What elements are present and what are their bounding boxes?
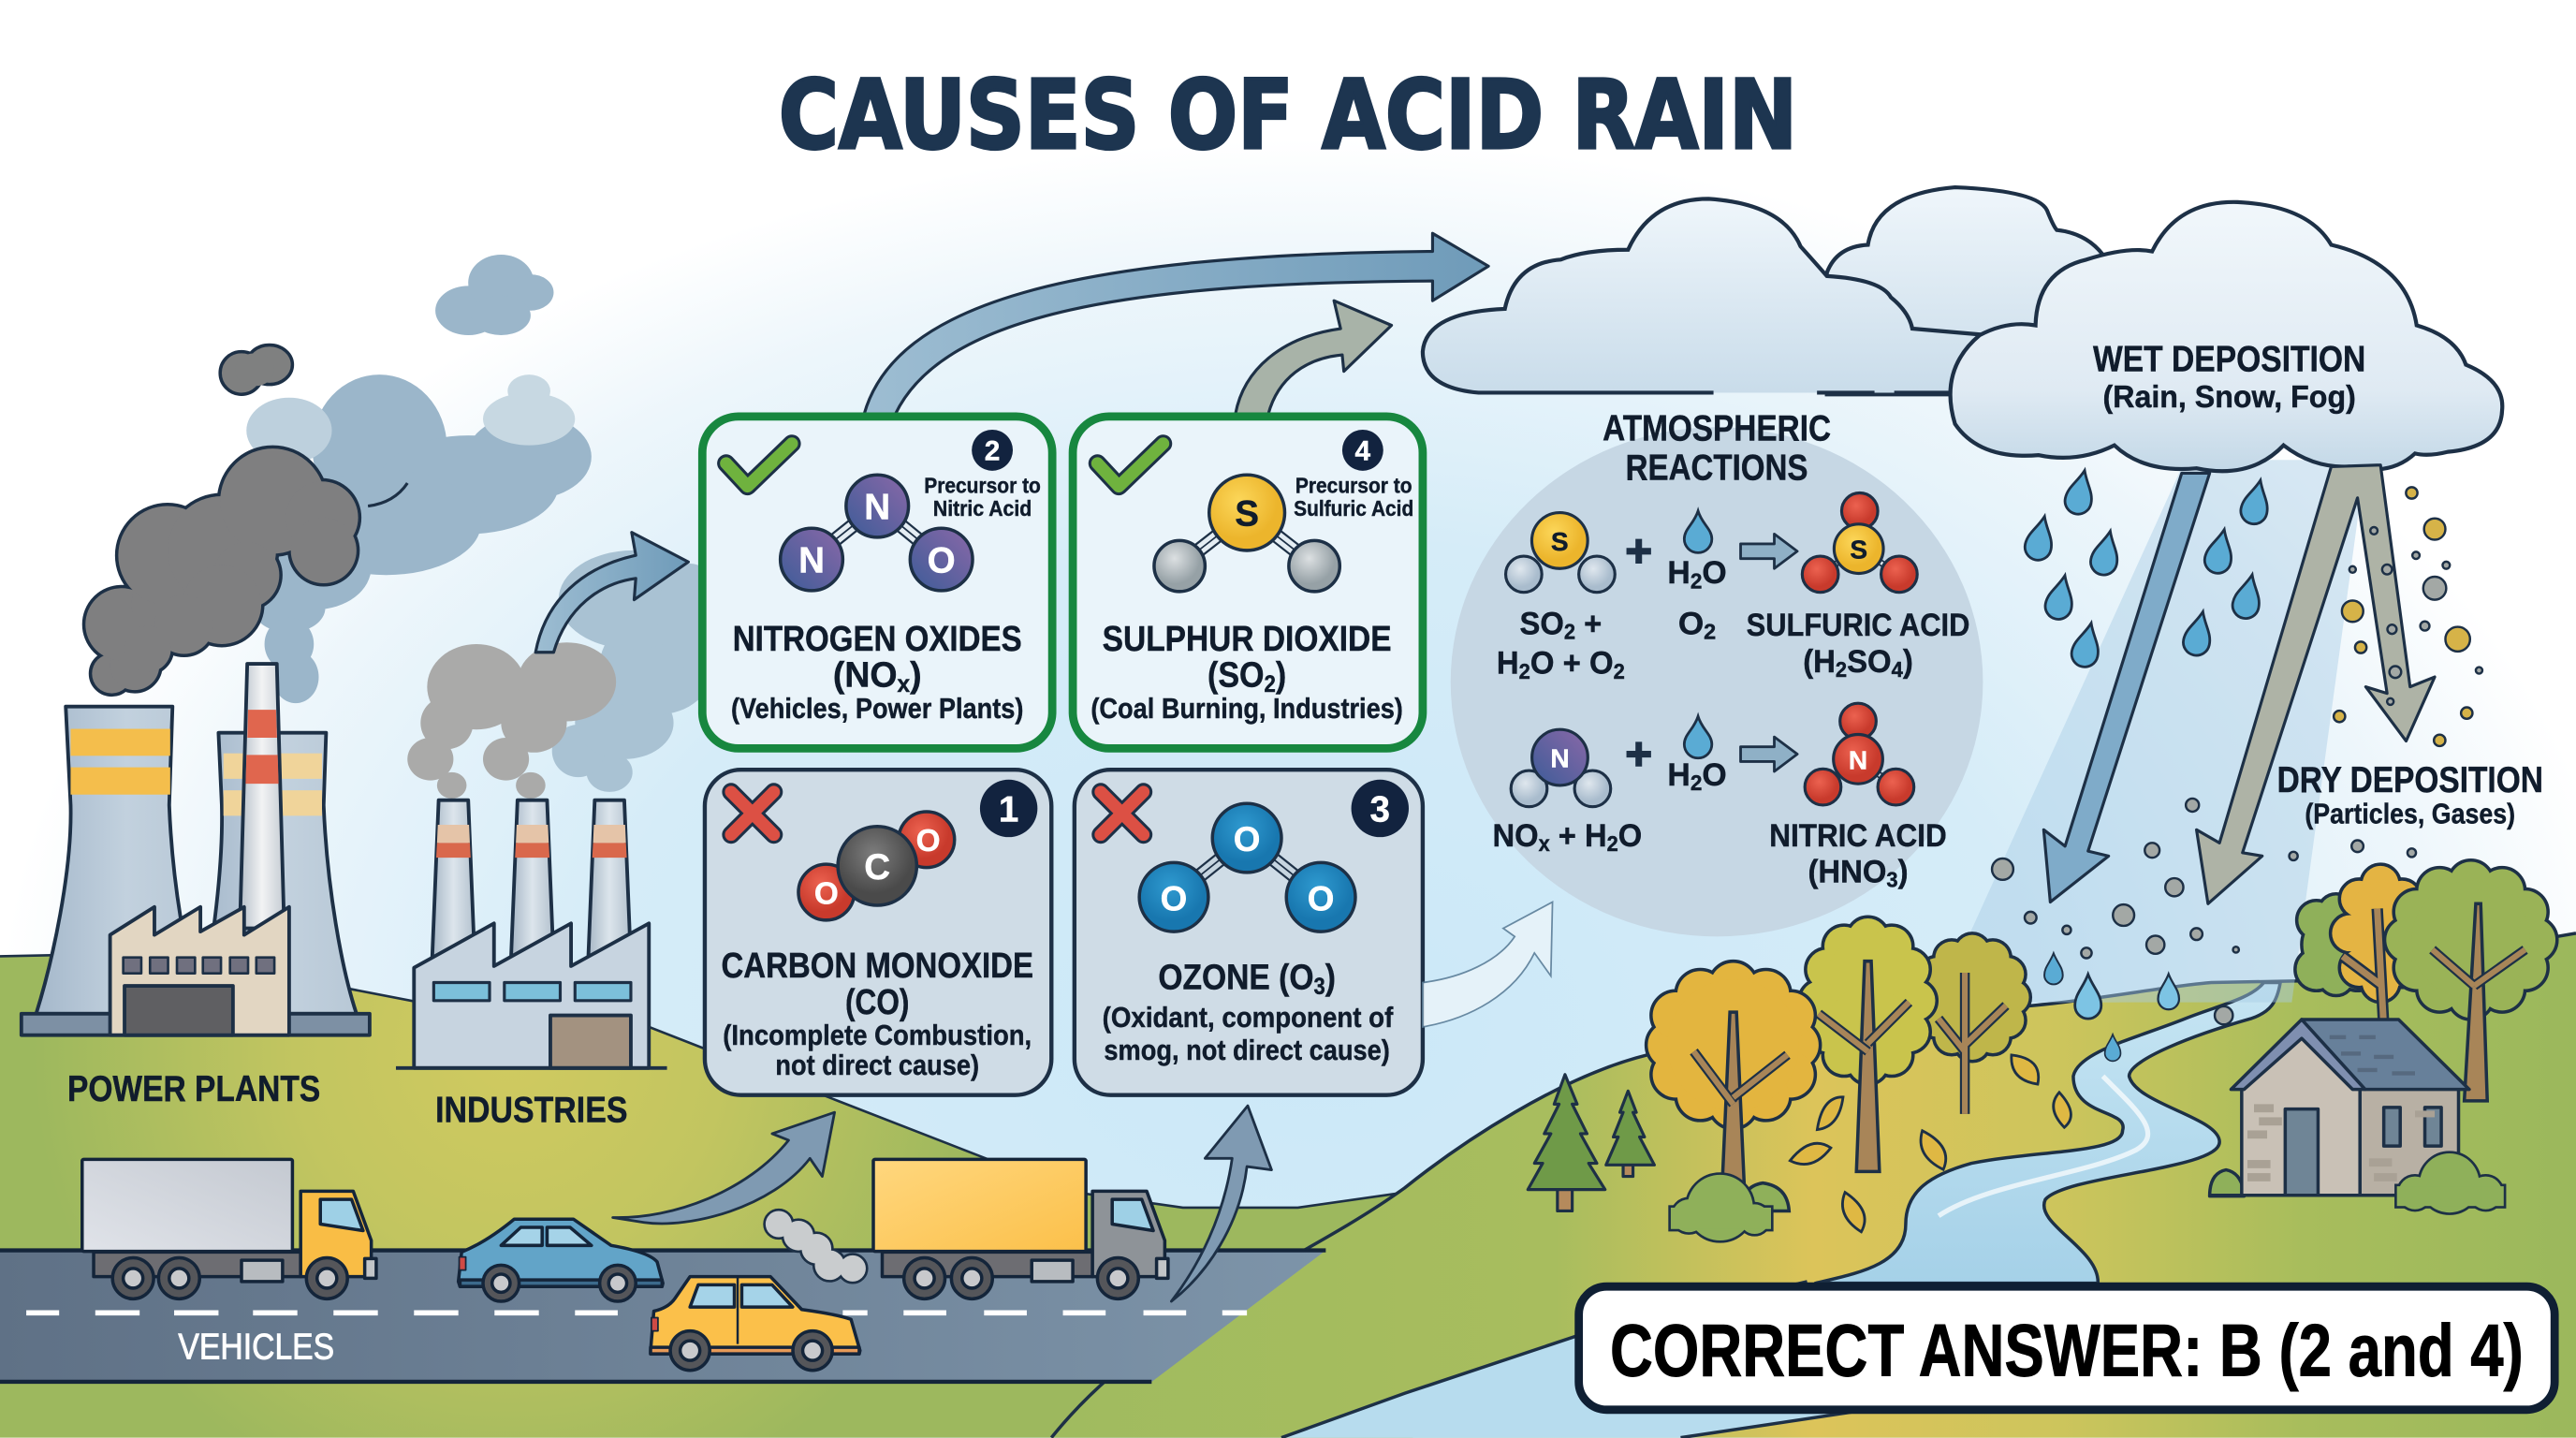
- card 3: ozone: [1075, 770, 1423, 1095]
- labels: [1497, 606, 1969, 683]
- house bush: [2397, 1153, 2504, 1212]
- labels: SULFURIC ACID: [1747, 608, 1969, 643]
- CO molecule: O: [814, 876, 839, 911]
- labels: 2: [1564, 620, 1575, 644]
- rain cloud with deposition label: WET DEPOSITION: [2093, 340, 2365, 380]
- note: [1294, 474, 1413, 521]
- labels: 3: [1886, 868, 1898, 892]
- icon: cross: [1101, 792, 1144, 835]
- labels: NITRIC ACID: [1769, 818, 1947, 854]
- labels: + H: [1550, 818, 1607, 854]
- tall stack: [240, 664, 285, 929]
- H2O: O: [1702, 555, 1727, 591]
- HNO3 product: [1805, 703, 1914, 805]
- badge 1: [980, 780, 1037, 837]
- H2O: 2: [1690, 770, 1702, 795]
- CO molecule: [798, 812, 955, 920]
- NO2 molecule: [781, 475, 973, 591]
- white truck: [82, 1159, 376, 1299]
- rain cloud with deposition label: (Rain, Snow, Fog): [2103, 380, 2356, 415]
- labels: SO: [1519, 606, 1566, 641]
- card text: ): [1325, 958, 1336, 997]
- O3 molecule: O: [1308, 879, 1334, 917]
- card 1: carbon monoxide: [705, 770, 1051, 1095]
- dry particles: [1992, 487, 2482, 1024]
- label: dry deposition: [2277, 760, 2543, 829]
- right trees: [2297, 862, 2555, 1101]
- industries illustration: [396, 800, 667, 1068]
- nitric acid reaction: [1493, 703, 1947, 892]
- H2SO4 product: S: [1850, 536, 1867, 565]
- card text: (NO: [833, 655, 898, 695]
- labels: 2: [1614, 659, 1625, 683]
- label: dry deposition: DRY DEPOSITION: [2277, 760, 2543, 800]
- labels: SO: [1847, 644, 1892, 680]
- power plant illustration: [22, 664, 370, 1035]
- labels: O + O: [1530, 646, 1614, 682]
- blue car: [459, 1219, 663, 1301]
- title: CAUSES OF ACID RAIN: [779, 61, 1797, 171]
- card text: (SO: [1208, 655, 1270, 695]
- note: Precursor to: [924, 474, 1041, 498]
- arrow: industries to cards: [535, 533, 688, 653]
- badge 4: [1342, 430, 1383, 471]
- house: [2210, 1020, 2469, 1196]
- exhaust smoke: [766, 1211, 866, 1282]
- labels: ): [1898, 854, 1909, 889]
- arrow: vehicles to ozone: [1171, 1106, 1271, 1301]
- factory: [110, 907, 289, 1035]
- label: power plants: POWER PLANTS: [67, 1069, 320, 1109]
- heading: atmospheric reactions: [1603, 408, 1831, 488]
- heading: atmospheric reactions: REACTIONS: [1626, 448, 1808, 488]
- yellow truck: [873, 1159, 1168, 1299]
- water drop: [1684, 716, 1712, 758]
- card text: SULPHUR DIOXIDE: [1103, 619, 1392, 658]
- note: Sulfuric Acid: [1294, 496, 1413, 521]
- NOx reactant: [1511, 729, 1611, 807]
- reaction arrow: [1741, 534, 1797, 568]
- H2O: H: [1667, 757, 1690, 793]
- NO2 molecule: N: [864, 488, 890, 528]
- labels: +: [1575, 606, 1602, 641]
- badge 1: 1: [999, 790, 1018, 830]
- labels: 2: [1704, 620, 1716, 644]
- badge 2: [972, 430, 1013, 471]
- note: Nitric Acid: [933, 496, 1032, 521]
- card 4: sulphur dioxide: [1073, 417, 1423, 748]
- arrow: vehicles to carbon monoxide: [613, 1112, 835, 1224]
- yellow car: [651, 1277, 860, 1371]
- arrow: nitrogen oxides up to cloud: [864, 233, 1488, 414]
- H2O: H: [1667, 555, 1690, 591]
- labels: x: [1539, 831, 1550, 856]
- card text: not direct cause): [775, 1049, 979, 1081]
- H2SO4 product: [1802, 493, 1917, 593]
- labels: (H: [1803, 644, 1837, 680]
- card text: [721, 946, 1033, 1081]
- card text: [731, 619, 1023, 725]
- tree A: [1647, 962, 1819, 1196]
- labels: [1493, 818, 1947, 892]
- reaction arrow: [1741, 737, 1797, 771]
- label: dry deposition: (Particles, Gases): [2305, 797, 2515, 829]
- labels: O: [1678, 606, 1703, 641]
- H2O: 2: [1690, 568, 1702, 593]
- rain beams: [1939, 460, 2365, 1003]
- badge 3: 3: [1370, 790, 1390, 830]
- fallen leaves: [1789, 1054, 2077, 1233]
- card text: ): [910, 655, 922, 695]
- road: [0, 1251, 1325, 1382]
- SO2 molecule: [1154, 475, 1339, 592]
- heading: atmospheric reactions: ATMOSPHERIC: [1603, 408, 1831, 448]
- card text: (Incomplete Combustion,: [723, 1019, 1032, 1051]
- O3 molecule: O: [1234, 820, 1260, 858]
- card text: (Oxidant, component of: [1103, 1001, 1394, 1034]
- clouds behind: [1423, 187, 2103, 394]
- badge 4: 4: [1355, 435, 1371, 466]
- correct answer box: [1579, 1286, 2554, 1410]
- water drop: [1684, 511, 1712, 552]
- tree C: [1915, 935, 2029, 1114]
- plus: [1627, 539, 1651, 564]
- card text: smog, not direct cause): [1104, 1034, 1390, 1066]
- SO2 reactant: S: [1551, 527, 1569, 556]
- badge 2: 2: [985, 435, 1000, 466]
- labels: NO: [1493, 818, 1541, 854]
- card text: x: [898, 672, 910, 697]
- plus: [1627, 741, 1651, 767]
- SO2 reactant: [1506, 513, 1615, 593]
- card text: NITROGEN OXIDES: [733, 619, 1022, 658]
- card text: ): [1276, 655, 1286, 695]
- rain cloud with deposition label: [1951, 202, 2502, 471]
- H2O: O: [1702, 757, 1727, 793]
- label: industries: INDUSTRIES: [435, 1091, 627, 1131]
- base slab: [22, 1014, 370, 1035]
- labels: ): [1903, 644, 1913, 680]
- CO molecule: O: [916, 824, 941, 858]
- NO2 molecule: N: [798, 541, 825, 581]
- cooling tower left: [37, 707, 200, 1014]
- autumn trees: [1647, 918, 2029, 1240]
- smoke clouds: [85, 255, 723, 799]
- cooling tower right: [198, 733, 357, 1014]
- pine trees: [1528, 1075, 1654, 1211]
- tree B: [1801, 918, 1936, 1171]
- card text: [1090, 619, 1403, 725]
- card text: 2: [1265, 672, 1276, 697]
- O3 molecule: [1139, 803, 1355, 932]
- icon: check: [726, 444, 792, 486]
- reaction circle panel: [1451, 427, 1983, 936]
- labels: H: [1497, 646, 1520, 682]
- labels: 4: [1892, 657, 1903, 682]
- arrow: wet deposition: [2043, 473, 2210, 902]
- labels: O: [1618, 818, 1642, 854]
- icon: cross: [731, 792, 774, 835]
- card text: [1103, 958, 1394, 1066]
- bushes: [1671, 1175, 1789, 1240]
- card text: OZONE (O: [1158, 958, 1333, 997]
- label: vehicles: VEHICLES: [178, 1327, 334, 1367]
- CO molecule: C: [864, 847, 890, 888]
- HNO3 product: N: [1849, 745, 1867, 774]
- right hill with river: [1051, 933, 2576, 1438]
- labels: 2: [1607, 831, 1618, 856]
- card text: (CO): [845, 982, 909, 1021]
- NOx reactant: N: [1550, 744, 1570, 773]
- left hill: [0, 953, 1412, 1438]
- card 2: nitrogen oxides: [702, 417, 1052, 748]
- faded arrow to atmospheric reactions: [1423, 902, 1553, 1027]
- labels: (HNO: [1808, 854, 1890, 889]
- rain drops: [2023, 468, 2274, 1061]
- badge 3: [1352, 780, 1409, 837]
- sulfuric acid reaction: [1497, 493, 1969, 683]
- labels: 2: [1519, 659, 1530, 683]
- card text: CARBON MONOXIDE: [721, 946, 1033, 985]
- NO2 molecule: O: [928, 541, 956, 581]
- SO2 molecule: S: [1235, 494, 1259, 535]
- note: [924, 474, 1041, 521]
- O3 molecule: O: [1161, 879, 1187, 917]
- labels: 2: [1836, 657, 1847, 682]
- icon: check: [1097, 444, 1164, 486]
- note: Precursor to: [1295, 474, 1412, 498]
- card text: 3: [1314, 975, 1325, 1000]
- arrow: dry deposition: [2197, 465, 2435, 903]
- card text: (Vehicles, Power Plants): [731, 692, 1023, 725]
- arrow: sulphur dioxide up to cloud: [1236, 301, 1392, 414]
- card text: (Coal Burning, Industries): [1090, 692, 1403, 725]
